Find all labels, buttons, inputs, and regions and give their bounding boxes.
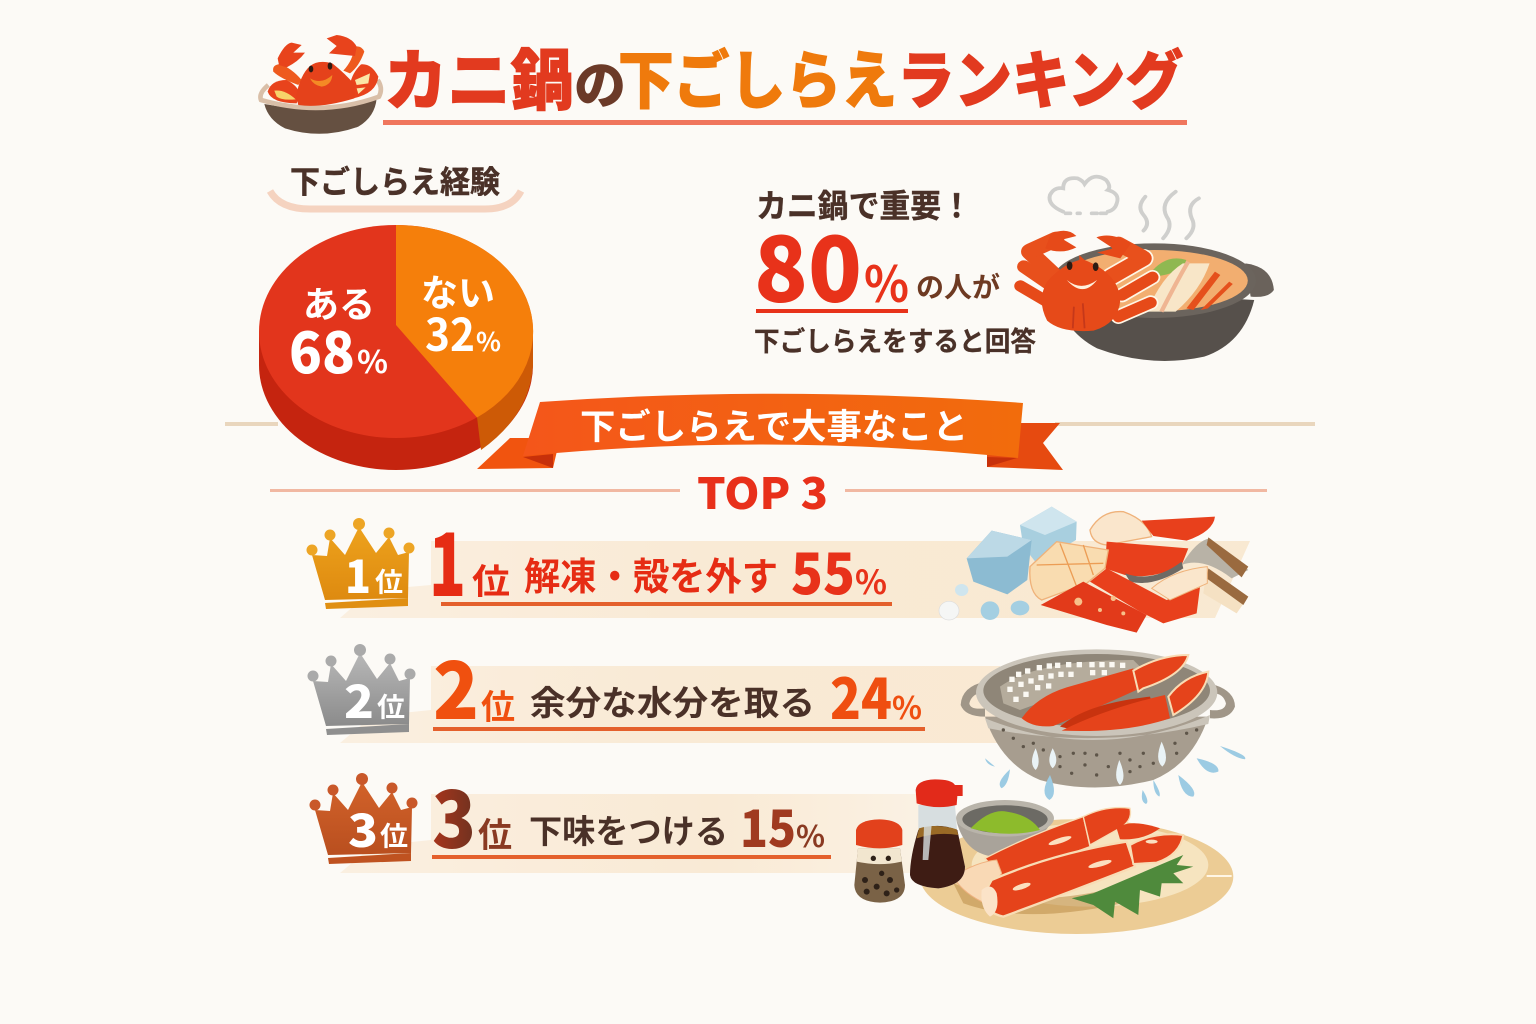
label: ない 32%: ない [421, 263, 495, 317]
crown: 1st: 位 [375, 561, 403, 600]
icon: ice cubes and crab shell pieces [939, 507, 1248, 633]
divider line: tan [225, 422, 1315, 426]
rank 3 text: 3 [432, 759, 476, 871]
crown: 1st: 1 [345, 541, 371, 606]
label: ない 32% [421, 263, 501, 364]
label: ある 68%: 68 [289, 309, 355, 390]
banner: 下ごしらえで大事なこと: 下ごしらえで大事なこと [580, 399, 968, 450]
title: 下ごしらえ [618, 31, 897, 122]
crab leg back [985, 817, 1090, 878]
rank 2 text: 24 [830, 655, 892, 736]
icon: steam [1050, 177, 1199, 238]
rank 1 text: 1 [429, 498, 466, 621]
rank 3 text: 15 [740, 790, 796, 862]
callout: 80%: 80 [754, 199, 862, 328]
icon: colander with crab legs and water drops [961, 649, 1245, 804]
crab body [1042, 255, 1120, 331]
crown: 3rd: 3 [348, 795, 378, 860]
TOP 3 heading: TOP 3 [697, 460, 828, 522]
ribbon tails [477, 438, 560, 469]
label: ある 68%: ある [303, 276, 375, 328]
label: ない 32%: % [476, 322, 501, 359]
icon: crab hot pot with steam [1020, 177, 1274, 361]
rank 1 text [429, 498, 892, 621]
label: ある 68%: % [357, 337, 388, 382]
callout: 80% [754, 181, 1036, 359]
title: の [574, 44, 626, 119]
rank 1 text: 解凍・殻を外す [524, 546, 778, 601]
rank 1 text: % [855, 556, 887, 604]
pot [1054, 288, 1254, 361]
rank 3 text: % [796, 812, 825, 856]
title [383, 28, 1187, 124]
callout: 80%: の人が [916, 266, 1000, 306]
crown: 2nd: 位 [377, 686, 405, 725]
crab legs [1020, 239, 1152, 317]
rank 2 text: 位 [481, 680, 515, 729]
icon: plate with seasoned crab legs [920, 800, 1233, 934]
callout: 80%: カニ鍋で重要！ [756, 181, 972, 227]
crown: 3rd [310, 773, 418, 864]
pie chart heading: 下ごしらえ経験 [290, 157, 500, 202]
small bowl [957, 822, 1052, 857]
rank row 1 band [340, 541, 1250, 618]
banner: 下ごしらえで大事なこと [477, 394, 1063, 470]
crown: 2nd [308, 644, 416, 735]
icon: soy sauce bottle [910, 779, 965, 888]
rank 3 text: 位 [478, 808, 512, 857]
label: ない 32%: 32 [425, 299, 475, 364]
rank 1 text: 位 [472, 554, 510, 605]
rank 1 text: 55 [791, 530, 855, 611]
title: カニ鍋 [384, 28, 574, 124]
illustrations in zoom coordinates [920, 507, 1248, 934]
crown: 3rd: 位 [380, 815, 408, 854]
crown: 1st [306, 518, 414, 609]
rank 2 text: % [892, 683, 922, 728]
crab leg front [982, 842, 1135, 917]
title: crab in pot icon [260, 35, 381, 134]
pie chart: experience 68 / 32 [259, 225, 533, 470]
callout: 80%: % [864, 245, 909, 317]
callout: 80%: 下ごしらえをすると回答 [754, 320, 1036, 359]
rank row 3 band [340, 794, 960, 873]
rank 2 text: 2 [433, 630, 479, 742]
rank 2 text: 余分な水分を取る [530, 676, 815, 725]
rank 3 text [432, 759, 831, 871]
title: ランキング [897, 31, 1183, 122]
rank 2 text [433, 630, 925, 742]
crown: 2nd: 2 [344, 666, 374, 731]
rank 3 text: 下味をつける [529, 805, 728, 853]
icon: pepper shaker [854, 819, 905, 903]
rank row 2 band [340, 666, 1000, 743]
label: ある 68% [289, 276, 388, 390]
